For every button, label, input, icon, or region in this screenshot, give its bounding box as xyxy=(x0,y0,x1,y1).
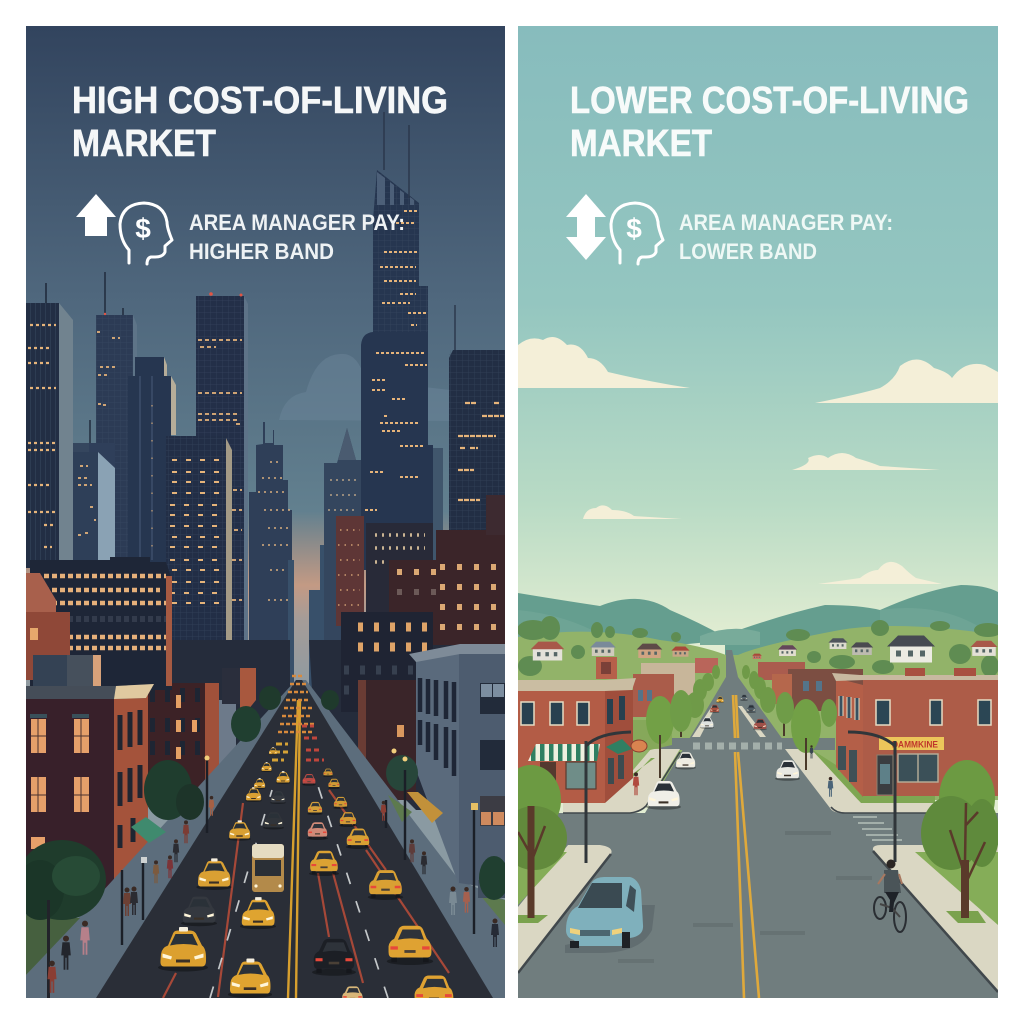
mid-distance buildings xyxy=(633,658,863,717)
heading: high cost-of-living market: MARKET xyxy=(72,123,216,165)
text: area manager pay lower band: AREA MANAGER PAY: xyxy=(679,210,893,235)
trees along street xyxy=(686,665,776,718)
lane dashes xyxy=(210,780,388,998)
icon: head with dollar sign left xyxy=(120,203,172,264)
trees right xyxy=(321,690,509,900)
cloud 1 xyxy=(518,337,690,388)
tree: foreground left xyxy=(501,765,567,918)
maroon block xyxy=(389,495,505,645)
panel: lower cost-of-living market xyxy=(501,26,1002,998)
cyclist xyxy=(874,860,906,932)
panel: high cost-of-living market xyxy=(16,26,509,1011)
tree: upper left xyxy=(231,686,281,742)
tower: far right xyxy=(449,305,505,535)
tower: fourth light side xyxy=(73,420,115,568)
mid-rise buildings right xyxy=(336,495,505,800)
right curb xyxy=(873,851,998,992)
bus xyxy=(252,844,284,892)
icon: head with dollar sign right: $ xyxy=(626,213,642,244)
lower-left grass xyxy=(518,852,567,905)
tower: central slab xyxy=(196,292,248,668)
street lamps xyxy=(122,748,478,945)
tree: mid left xyxy=(144,760,204,820)
lower-right sidewalk xyxy=(873,845,998,990)
tree: large lower left xyxy=(16,840,106,998)
heading: high cost-of-living market: HIGH COST-OF-LIVING xyxy=(72,80,448,122)
dark cars xyxy=(181,791,286,926)
icon: up arrow xyxy=(76,194,116,236)
text: area manager pay higher band: AREA MANAGER PAY: xyxy=(189,210,405,235)
brick tower xyxy=(336,516,364,626)
text: area manager pay higher band xyxy=(189,210,405,264)
road xyxy=(518,650,998,998)
road markings xyxy=(618,695,902,998)
blue car xyxy=(565,877,655,953)
far traffic lights xyxy=(272,676,324,760)
street lamp left xyxy=(586,732,631,863)
tower: third with setback xyxy=(128,357,176,570)
tower: foreground office slab xyxy=(166,436,232,646)
building: foreground brick corner xyxy=(26,684,154,897)
shop sign xyxy=(879,737,944,750)
yellow awning xyxy=(407,792,443,823)
crosswalk upper xyxy=(693,742,782,750)
icon: head with dollar sign right xyxy=(611,203,663,264)
icon: double arrow xyxy=(566,194,606,260)
heading: lower cost-of-living market: MARKET xyxy=(570,123,712,165)
mid street trees xyxy=(646,690,837,778)
clouds xyxy=(518,337,998,584)
building: right corner store xyxy=(832,668,998,797)
far haze buildings xyxy=(288,545,324,688)
green valley xyxy=(518,626,998,800)
heading: high cost-of-living market xyxy=(72,80,448,165)
centre double line xyxy=(288,700,300,998)
road and sidewalks: left panel xyxy=(26,680,505,998)
round shop sign xyxy=(631,740,647,752)
daytime sky xyxy=(518,26,998,998)
sidewalk right xyxy=(300,680,505,998)
dark street-wall masses xyxy=(172,640,454,810)
sidewalk left xyxy=(26,680,302,998)
text: area manager pay lower band: LOWER BAND xyxy=(679,239,817,264)
cloud behind towers xyxy=(279,354,450,421)
tower: tall spire xyxy=(361,112,443,598)
lawn left xyxy=(26,915,80,975)
cloud 2 xyxy=(815,359,998,403)
red bus lanes xyxy=(163,790,449,998)
lower-left sidewalk xyxy=(518,845,612,973)
dark low block xyxy=(341,612,433,694)
dark mid block xyxy=(366,523,433,613)
cars on road xyxy=(565,695,800,953)
dusk sky xyxy=(26,26,505,998)
pedestrians xyxy=(47,796,499,993)
skyline towers xyxy=(26,112,505,690)
lawn near grey building xyxy=(388,795,412,822)
sidewalks upper xyxy=(563,706,935,813)
upper curb lines xyxy=(563,752,931,813)
road wear patches xyxy=(618,833,872,961)
bushes on hills xyxy=(517,616,1002,677)
tower: far centre xyxy=(249,422,292,640)
icon: head with dollar sign left: $ xyxy=(135,213,151,244)
building: grey corner right xyxy=(407,644,505,898)
tree: foreground right xyxy=(921,760,999,918)
tree base patches xyxy=(518,911,986,923)
lower-right grass xyxy=(915,852,998,925)
tower: second left xyxy=(96,272,137,565)
striped awning xyxy=(528,744,600,761)
roadway xyxy=(96,680,493,998)
cloud 3 xyxy=(792,453,940,470)
lawn right xyxy=(482,898,505,925)
tower: far left tall xyxy=(26,283,73,568)
shop sign: DAMMKINE xyxy=(892,740,938,750)
houses xyxy=(531,636,997,662)
street lamp right xyxy=(848,732,895,862)
text: area manager pay lower band xyxy=(679,210,893,264)
pedestrians right xyxy=(633,745,833,797)
left curb xyxy=(518,854,611,973)
traffic: taxis and cars xyxy=(158,676,455,1011)
rear-facing taxis xyxy=(302,769,455,1011)
cloud 4 xyxy=(583,505,682,519)
crosswalk right xyxy=(853,817,902,840)
heading: lower cost-of-living market: LOWER COST-OF-LIVING xyxy=(570,80,969,122)
grass strips upper xyxy=(630,720,935,803)
centre double yellow xyxy=(733,695,759,998)
cross street upper xyxy=(660,738,835,750)
front-facing taxis xyxy=(158,747,290,998)
building: left corner store xyxy=(518,657,647,803)
brick low block by the grey corner xyxy=(358,680,416,800)
sidewalks lower with grass xyxy=(518,752,998,992)
brick building behind left xyxy=(148,668,256,790)
text: area manager pay higher band: HIGHER BAND xyxy=(189,239,334,264)
tower: pointed mid right xyxy=(324,428,361,640)
street trees xyxy=(16,686,509,998)
rooftop boxes xyxy=(33,655,101,686)
dark low building left xyxy=(26,557,172,690)
distant hills xyxy=(518,585,998,660)
heading: lower cost-of-living market xyxy=(570,80,969,165)
awning green xyxy=(131,817,166,843)
cloud 5 xyxy=(818,562,942,584)
